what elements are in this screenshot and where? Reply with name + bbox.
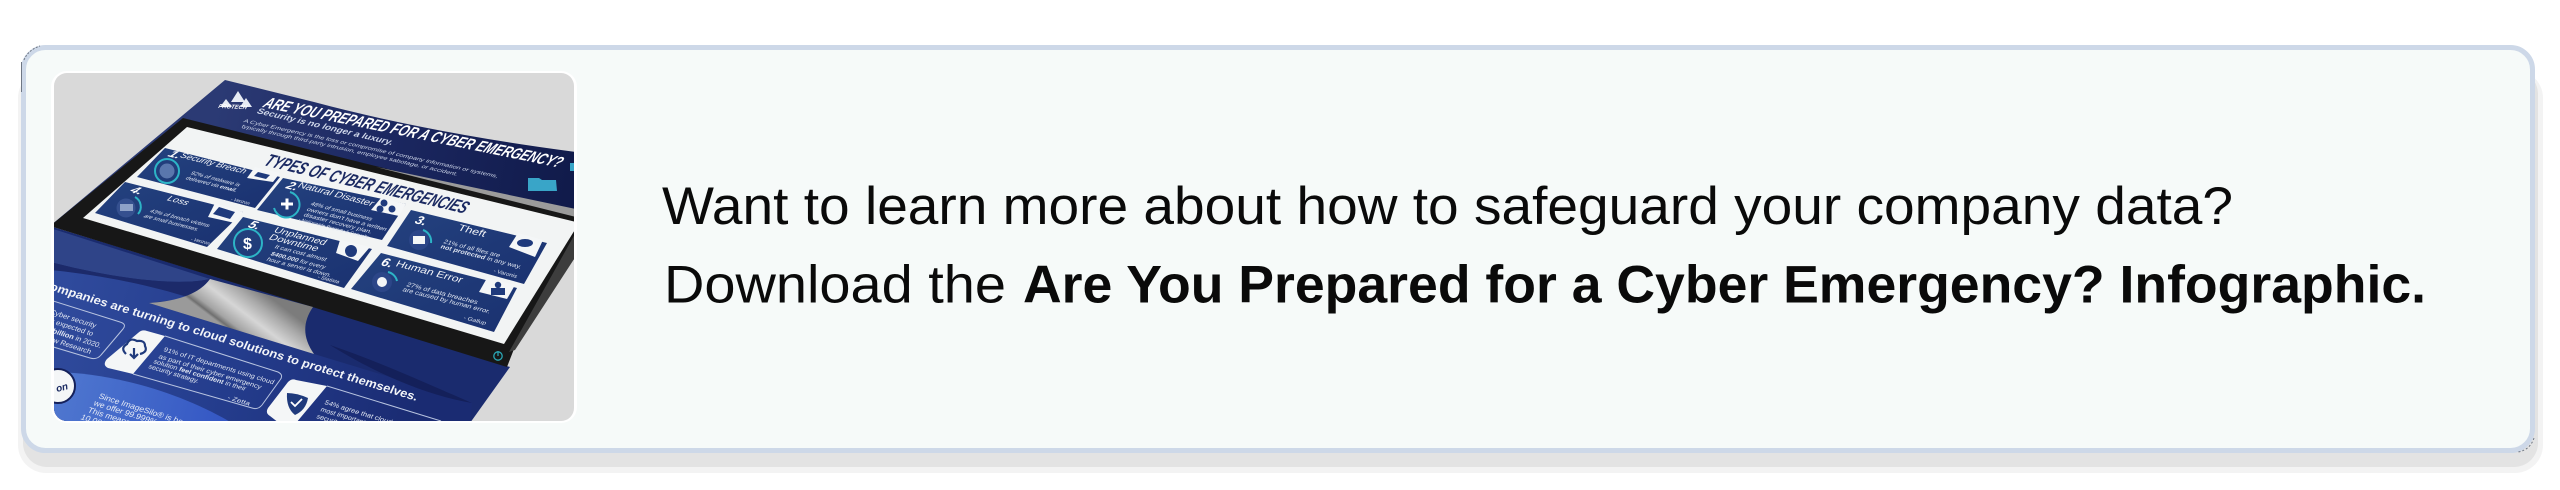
panel: loss: Loss bbox=[164, 195, 192, 207]
stat card: shield: security bbox=[315, 414, 342, 427]
text line 2 bold: Are You Prepared for a Cyber Emergency? Infographic. bbox=[1023, 256, 2426, 314]
panel: loss: - Verizon bbox=[189, 237, 211, 246]
panel: natural disaster bbox=[257, 178, 406, 240]
panel: security breach: Security Breach bbox=[177, 152, 250, 176]
icon: wallet bbox=[409, 230, 431, 250]
monitor stand bbox=[149, 279, 314, 354]
folder icon bbox=[528, 178, 557, 191]
monitor side edge bbox=[509, 232, 576, 352]
panel: security breach: delivered via email. bbox=[184, 176, 239, 193]
panel: human error: are caused by human error. bbox=[401, 287, 492, 315]
panel: natural disaster: Natural Disaster bbox=[295, 181, 377, 209]
panel: human error: - Gallup bbox=[462, 316, 487, 326]
stat card: cloud: as part of their cyber emergency bbox=[157, 354, 263, 391]
icon: person bbox=[479, 280, 514, 299]
icon: dollar circle: $ bbox=[243, 236, 252, 253]
stat card: shield: 54% agree that cloud bbox=[323, 400, 393, 426]
lower-left paragraph: This means bbox=[86, 405, 132, 427]
poster sheet bbox=[54, 80, 574, 223]
stat card: market size: Cyber security bbox=[49, 308, 99, 330]
upper-left lighter swoosh bbox=[50, 228, 210, 282]
panel: natural disaster: 48% of small business bbox=[309, 201, 374, 222]
stat card: market size bbox=[15, 300, 124, 359]
panel: unplanned downtime: $400,000 for every bbox=[269, 251, 328, 271]
dark swoosh bbox=[54, 263, 210, 282]
icon: plus circle bbox=[274, 192, 300, 218]
poster intro line 1: A Cyber Emergency is the loss or compromise of company information or systems, bbox=[242, 119, 500, 180]
icon: lock bbox=[247, 170, 278, 182]
panel: unplanned downtime: Downtime bbox=[266, 233, 322, 254]
stat card: cloud: security strategy. bbox=[147, 364, 200, 385]
panel: theft: not protected in any way. bbox=[439, 244, 523, 271]
panel: unplanned downtime: hour a server is down. bbox=[265, 257, 333, 279]
bezel reflection bbox=[376, 167, 576, 217]
icon: question mark bbox=[208, 203, 243, 223]
stat card: market size: - Grand View Research bbox=[15, 325, 93, 356]
panel: natural disaster: disaster recovery plan. bbox=[302, 212, 374, 235]
stat card: shield bbox=[267, 379, 441, 427]
panel: human error: Human Error bbox=[393, 259, 466, 286]
text line 2 regular: Download the bbox=[664, 256, 1006, 314]
cloud badge bbox=[41, 369, 75, 403]
panel: security breach bbox=[137, 148, 280, 208]
panel: theft: 3. bbox=[412, 213, 431, 228]
panel: human error bbox=[351, 253, 517, 332]
power icon bbox=[494, 351, 502, 360]
icon: shield bbox=[287, 393, 308, 415]
stat card: cloud: solution feel confident in their bbox=[152, 359, 248, 393]
second folder icon bbox=[570, 163, 574, 171]
monitor screen bbox=[83, 127, 576, 344]
panel: unplanned downtime: Unplanned bbox=[271, 226, 329, 248]
heading background bbox=[54, 270, 395, 421]
panel: unplanned downtime: - Statista bbox=[316, 275, 341, 285]
light blue lower-left panel bbox=[50, 372, 232, 423]
panel: loss bbox=[95, 182, 243, 247]
panel: loss: are small businesses. bbox=[142, 214, 201, 232]
panel: loss: 43% of breach victims bbox=[148, 209, 212, 229]
panel: theft bbox=[387, 210, 547, 284]
icon: clock bbox=[336, 240, 370, 261]
text block: call to action bbox=[662, 177, 2426, 314]
icon: cloud bbox=[123, 340, 146, 358]
stat card: market size: is expected to bbox=[47, 316, 95, 338]
panel: security breach: 1. bbox=[165, 148, 186, 161]
stat card: cloud bbox=[105, 330, 282, 409]
poster logo: PROTECH bbox=[217, 104, 248, 111]
icon: disaster bbox=[371, 198, 406, 216]
monitor bezel bbox=[50, 118, 576, 367]
panel: natural disaster: - Nationwide Property & Casualty bbox=[297, 217, 371, 240]
panel: theft: 21% of all files are bbox=[442, 239, 502, 259]
lower-left paragraph: Since ImageSilo® is hosted bbox=[97, 391, 201, 431]
cloud badge: on bbox=[55, 381, 69, 395]
dark wedge at right bbox=[330, 345, 472, 403]
panel: theft: - Varonis bbox=[492, 269, 519, 280]
image frame bbox=[51, 71, 577, 423]
stat card: cloud: 91% of IT departments using cloud bbox=[162, 347, 276, 386]
icon: thief bbox=[509, 236, 542, 257]
lower-left paragraph: we offer 99.999% bbox=[91, 398, 160, 427]
poster logo bbox=[217, 91, 252, 111]
panel: security breach: - Verizon bbox=[229, 197, 251, 206]
icon: dollar circle bbox=[234, 229, 262, 257]
panel: unplanned downtime: 5. bbox=[245, 218, 265, 232]
poster intro line 2: typically through third-party intrusion, employee sabotage, or accident. bbox=[240, 124, 460, 177]
image: infographic shown on a monitor mockup bbox=[54, 73, 574, 421]
stat card: shield: most important bbox=[319, 407, 367, 426]
stat card: market size: $170 billion in 2020. bbox=[33, 321, 103, 350]
stat card: cloud: - Zetta bbox=[226, 395, 252, 408]
text line 1: Want to learn more about how to safeguard your company data? bbox=[662, 177, 2233, 236]
poster lower section bbox=[50, 226, 510, 423]
icon: breach target bbox=[155, 159, 179, 183]
panel: natural disaster: 2. bbox=[282, 179, 303, 193]
panel: loss: 4. bbox=[126, 184, 148, 197]
poster subtitle: Security is no longer a luxury. bbox=[255, 107, 396, 147]
panel: unplanned downtime bbox=[217, 217, 372, 288]
poster lower heading: Companies are turning to cloud solutions to protect themselves. bbox=[39, 277, 421, 404]
panel: security breach: 92% of malware is bbox=[189, 171, 242, 188]
icon: globe bbox=[372, 272, 397, 292]
poster title: ARE YOU PREPARED FOR A CYBER EMERGENCY? bbox=[259, 94, 568, 171]
screen heading: TYPES OF CYBER EMERGENCIES bbox=[260, 151, 473, 218]
panel: human error: 6. bbox=[378, 255, 397, 270]
panel: theft: Theft bbox=[455, 223, 488, 240]
icon: server bbox=[116, 197, 141, 218]
panel: natural disaster: owners don't have a written bbox=[305, 207, 389, 233]
panel: unplanned downtime: It can cost almost bbox=[273, 244, 329, 263]
panel: human error: 27% of data breaches bbox=[405, 282, 479, 306]
lower-left paragraph: 10,000 bbox=[79, 412, 109, 429]
